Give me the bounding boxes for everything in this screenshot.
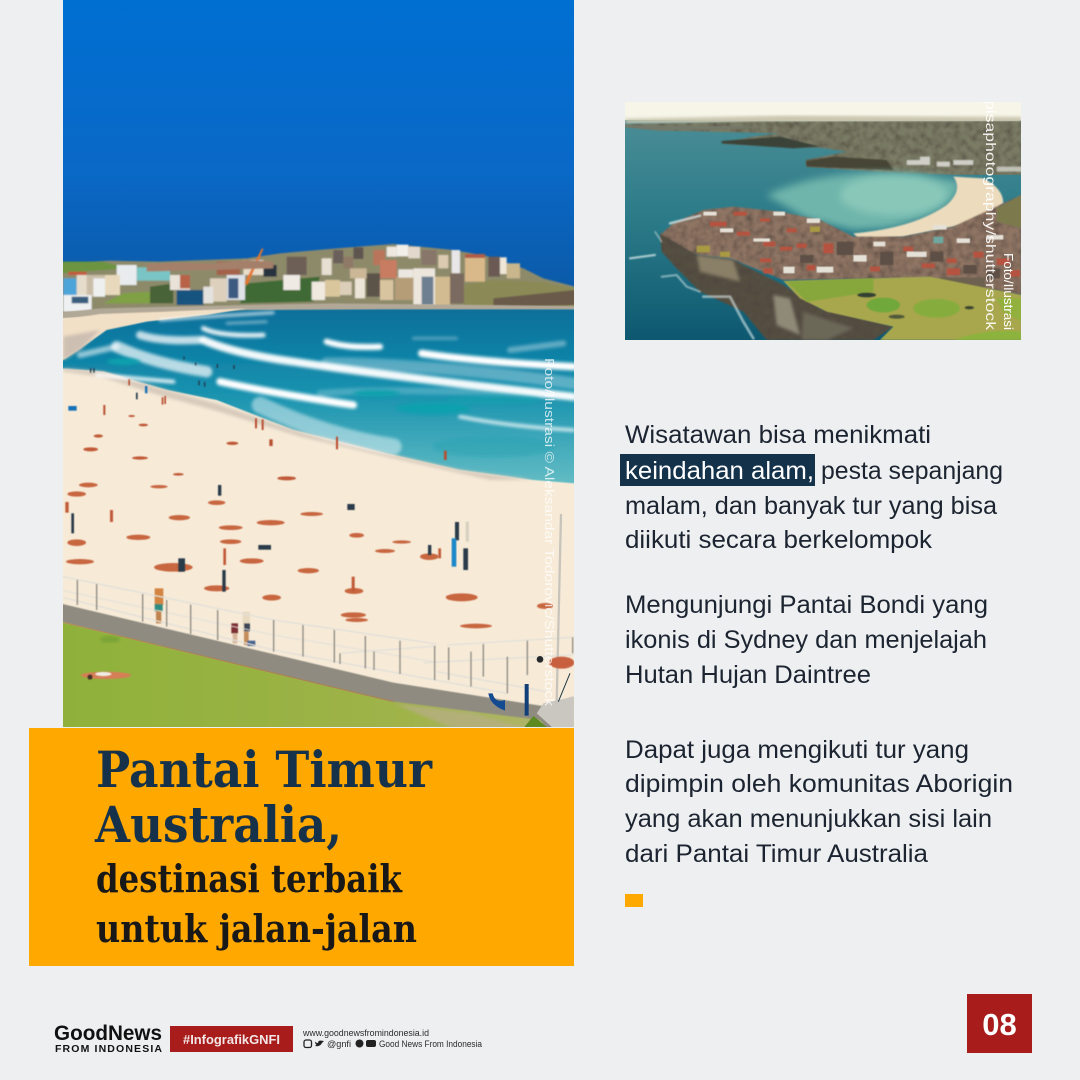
swimmers xyxy=(90,357,235,399)
subheading: destinasi terbaik xyxy=(96,856,403,901)
icon: youtube xyxy=(366,1040,376,1047)
upper beach sand xyxy=(60,308,247,362)
credit: left photo: Foto/Ilustrasi © Aleksandar Todorovic/Shutterstock xyxy=(542,358,556,707)
waves xyxy=(80,313,573,447)
far land xyxy=(625,121,1022,175)
cliff xyxy=(660,233,893,340)
text block 2 xyxy=(625,591,988,689)
hill with town xyxy=(60,244,575,317)
panel: title block xyxy=(29,728,574,966)
text block 1: diikuti secara berkelompok xyxy=(625,526,933,554)
people on path xyxy=(155,588,255,646)
credits: right photo xyxy=(983,100,1016,331)
credits: right photo: pisaphotography/shutterstock xyxy=(983,100,999,331)
bay shallows xyxy=(767,173,960,230)
text block 2: ikonis di Sydney dan menjelajah xyxy=(625,626,987,654)
turquoise patches xyxy=(107,358,553,457)
headland town xyxy=(660,195,1022,295)
sunbathers xyxy=(66,483,553,628)
text block 3: dari Pantai Timur Australia xyxy=(625,840,928,868)
beach xyxy=(853,177,1003,240)
social links xyxy=(302,1028,482,1049)
hashtag badge: #InfografikGNFI xyxy=(183,1033,280,1047)
text block 2: Hutan Hujan Daintree xyxy=(625,661,871,689)
logo: GoodNews From Indonesia: FROM INDONESIA xyxy=(55,1043,162,1055)
subheading: untuk jalan-jalan xyxy=(96,906,417,951)
icon: twitter xyxy=(315,1040,324,1046)
sunbather on grass xyxy=(81,672,131,680)
social links: Good News From Indonesia xyxy=(379,1039,482,1049)
fence xyxy=(60,576,573,693)
credits: right photo: Foto/Ilustrasi xyxy=(1001,253,1016,330)
grass xyxy=(60,622,547,728)
sea xyxy=(60,309,575,483)
wet sand xyxy=(63,368,533,480)
heading xyxy=(94,740,433,854)
far right group xyxy=(549,657,574,669)
text block 1 xyxy=(625,421,1003,554)
text block 1: keindahan alam, xyxy=(625,457,814,485)
subheading xyxy=(96,856,417,951)
orange accent square xyxy=(625,894,643,907)
icon: facebook xyxy=(356,1040,364,1048)
social links: www.goodnewsfromindonesia.id xyxy=(302,1028,429,1038)
blue signs xyxy=(525,684,529,716)
photo: Bondi beach xyxy=(60,0,575,728)
sky xyxy=(625,102,1022,120)
heading: Pantai Timur xyxy=(96,740,433,799)
text block 3: Dapat juga mengikuti tur yang xyxy=(625,736,969,764)
logo: GoodNews From Indonesia xyxy=(54,1022,162,1055)
page number: 08 xyxy=(982,1007,1017,1042)
text block 3: dipimpin oleh komunitas Aborigin xyxy=(625,770,1013,798)
surf xyxy=(630,216,753,338)
text block 1: Wisatawan bisa menikmati xyxy=(625,421,931,449)
highlight box xyxy=(620,454,815,486)
text block 3 xyxy=(625,736,1013,868)
social links: @gnfi xyxy=(327,1039,351,1049)
page number xyxy=(967,994,1032,1053)
text block 3: yang akan menunjukkan sisi lain xyxy=(625,805,992,833)
text block 1: malam, dan banyak tur yang bisa xyxy=(625,492,997,520)
logo: GoodNews From Indonesia: GoodNews xyxy=(54,1022,162,1045)
text block 2: Mengunjungi Pantai Bondi yang xyxy=(625,591,988,619)
heading: Australia, xyxy=(94,795,342,854)
path xyxy=(60,603,573,728)
photo: aerial view of the bay xyxy=(625,100,1022,340)
golf course xyxy=(783,277,1022,340)
hashtag badge xyxy=(170,1026,293,1052)
icon: instagram xyxy=(304,1040,312,1048)
lamp pole xyxy=(557,514,561,703)
text block 1: pesta sepanjang xyxy=(821,457,1003,485)
seawall xyxy=(60,303,575,318)
